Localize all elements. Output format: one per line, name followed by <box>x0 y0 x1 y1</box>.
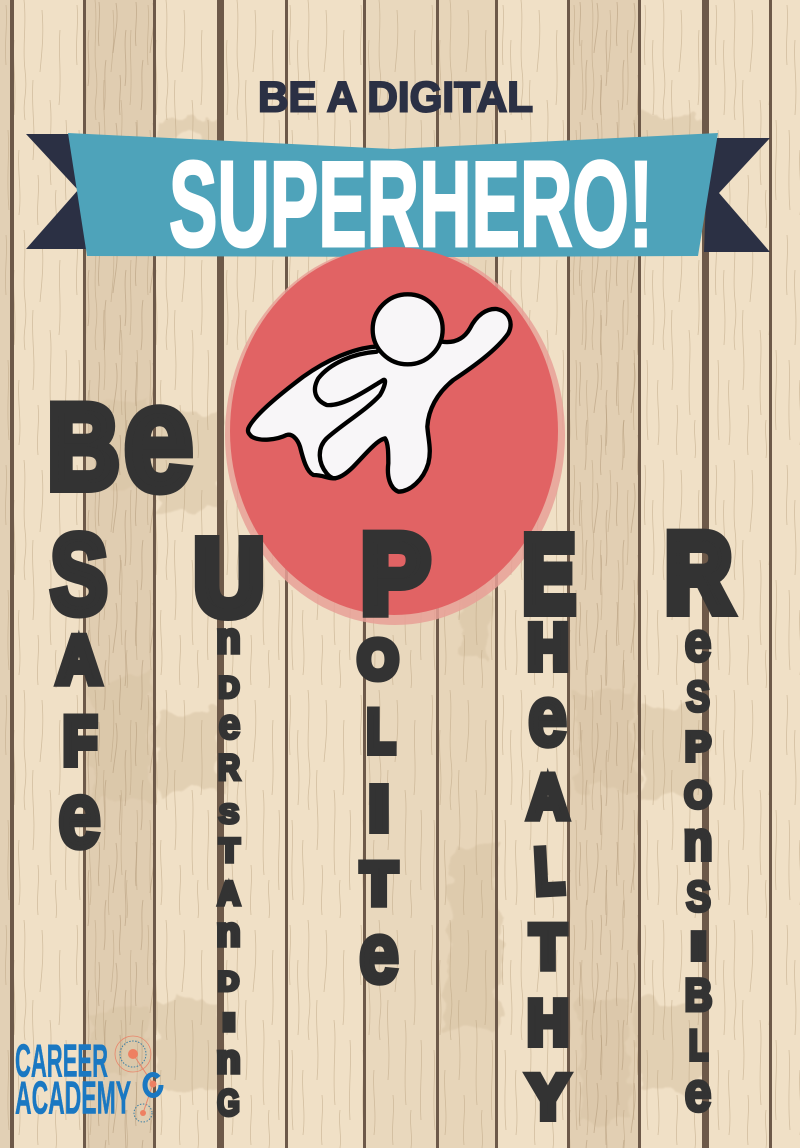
word: Understanding: n <box>216 615 240 662</box>
word: Responsible: R <box>666 512 732 635</box>
word: Healthy <box>523 514 575 1131</box>
word: Be: e <box>124 354 194 522</box>
banner ribbon tail: right <box>704 138 770 252</box>
word: Understanding: S <box>219 799 239 829</box>
word: Responsible: P <box>685 724 711 770</box>
word: Polite <box>358 513 430 1001</box>
word: Responsible: n <box>684 812 712 872</box>
word: Responsible: O <box>684 774 712 816</box>
circle halo <box>225 245 565 625</box>
word: Healthy: E <box>523 514 575 634</box>
word: Responsible: e <box>684 610 712 673</box>
word: Safe: A <box>57 623 101 698</box>
word: Be: B <box>48 380 120 514</box>
word: Responsible: I <box>690 926 706 968</box>
word: Understanding: G <box>217 1083 240 1124</box>
word: Healthy: H <box>528 611 568 683</box>
word: Be <box>48 354 194 522</box>
word: Polite: e <box>359 906 399 1001</box>
word: Understanding: R <box>218 748 240 788</box>
word: Understanding: I <box>224 1010 234 1037</box>
word: Polite: O <box>358 630 398 690</box>
icon: flying superhero figure <box>248 294 511 492</box>
word: Polite: P <box>362 513 430 636</box>
word: Healthy: T <box>530 913 566 981</box>
banner ribbon tail: left <box>26 134 90 249</box>
word: Healthy: A <box>528 763 568 831</box>
logo: career academy <box>15 1034 161 1124</box>
word: Understanding: T <box>220 832 240 869</box>
word: Responsible <box>666 512 732 1123</box>
word: Healthy: L <box>533 834 565 908</box>
word: Healthy: H <box>528 988 568 1058</box>
word: Understanding: U <box>194 519 264 637</box>
heading: be a digital: BE A DIGITAL <box>258 74 533 122</box>
word: Understanding: A <box>218 875 240 912</box>
logo: career academy: CAREER <box>15 1034 108 1086</box>
word: Safe: F <box>63 703 97 779</box>
banner ribbon <box>68 133 718 257</box>
word: Understanding <box>194 519 264 1124</box>
word: Safe: e <box>58 762 101 867</box>
word: Responsible: S <box>686 873 711 921</box>
word: Understanding: D <box>218 967 239 997</box>
word: Polite: I <box>366 772 392 846</box>
word: Responsible: e <box>684 1060 712 1123</box>
word: Polite: T <box>362 852 396 917</box>
word: Polite: L <box>367 698 395 765</box>
word: Safe <box>50 512 108 867</box>
word: Understanding: e <box>218 700 240 748</box>
word: Responsible: L <box>689 1022 708 1068</box>
word: Understanding: n <box>216 911 240 955</box>
word: Healthy: Y <box>528 1063 568 1131</box>
word: Understanding: D <box>218 672 240 705</box>
word: Understanding: n <box>216 1039 240 1082</box>
word: Responsible: S <box>686 673 710 721</box>
red circle <box>230 247 558 615</box>
word: Healthy: e <box>528 669 567 764</box>
logo: career academy: ACADEMY <box>15 1072 131 1124</box>
word: Responsible: B <box>684 970 712 1020</box>
word: Safe: S <box>50 512 108 637</box>
